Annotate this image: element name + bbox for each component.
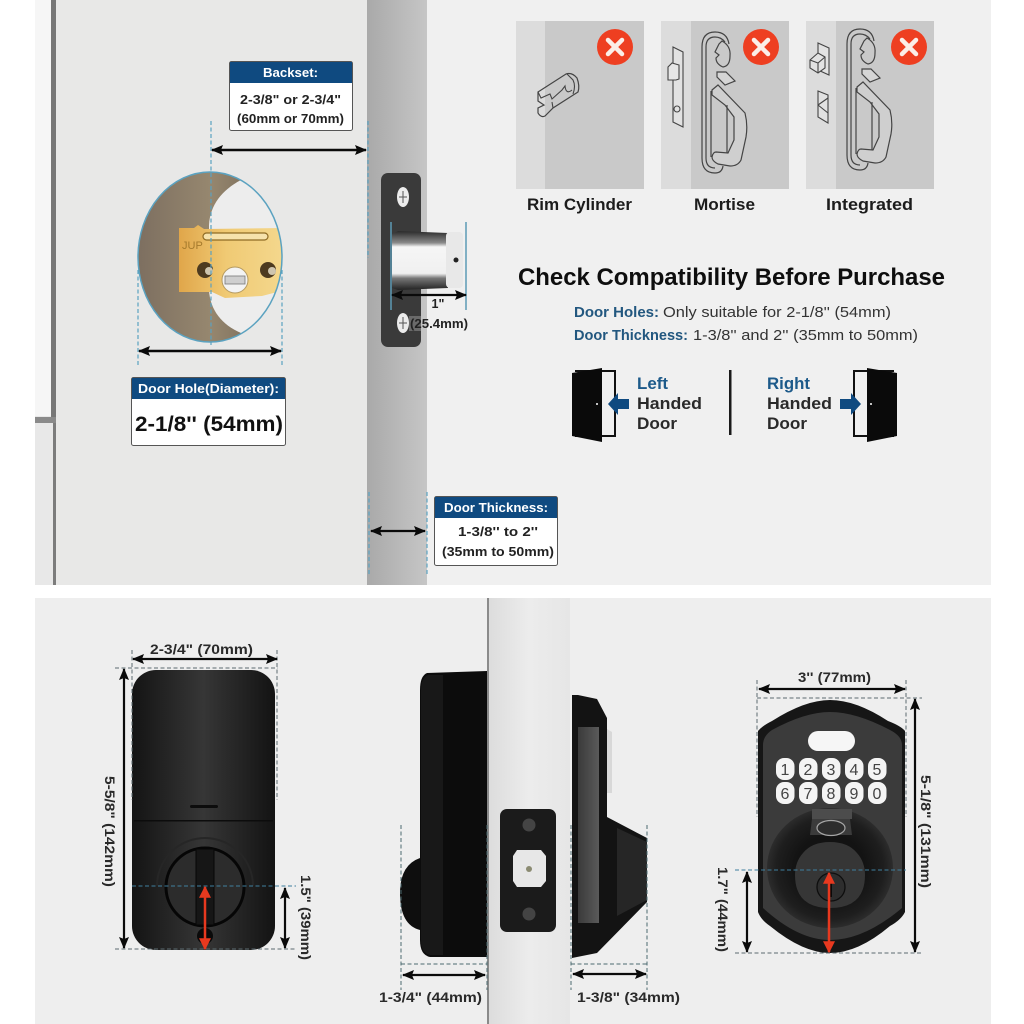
- labels: interior unit: 5-5/8" (142mm): [102, 776, 118, 887]
- dimension lines: interior unit: [115, 650, 296, 949]
- product: interior unit side: [400, 671, 487, 957]
- card: integrated: [806, 21, 934, 189]
- arrow: backset: [212, 149, 366, 151]
- arrow: bolt length: [392, 294, 466, 296]
- label: bolt length: 1": [432, 297, 445, 311]
- labels: interior unit: 2-3/4" (70mm): [150, 641, 253, 657]
- dimension lines: keypad front: [735, 680, 922, 953]
- labels: keypad front: 1.7" (44mm): [715, 867, 731, 952]
- right handed label: [767, 374, 832, 433]
- compatibility notes: [574, 304, 918, 344]
- card: mortise: [661, 21, 789, 189]
- right handed label: Handed: [767, 394, 832, 413]
- keypad buttons: 4: [850, 762, 859, 779]
- callout: door hole diameter: Door Hole(Diameter):: [138, 381, 279, 396]
- callout: door thickness: 1-3/8'' to 2'': [458, 525, 538, 539]
- left handed label: Handed: [637, 394, 702, 413]
- lock type labels: Rim Cylinder: [527, 195, 632, 214]
- callout: door thickness: [434, 496, 558, 566]
- label: bolt length: [410, 297, 468, 331]
- callout: door thickness: Door Thickness:: [444, 501, 548, 515]
- door cross-section: [487, 598, 570, 1024]
- keypad buttons: 1: [781, 762, 790, 779]
- keypad buttons: 2: [804, 762, 813, 779]
- panel: lock dimensions: [35, 598, 991, 1024]
- right handed label: Right: [767, 374, 810, 393]
- callout: backset: 2-3/8" or 2-3/4": [240, 93, 341, 107]
- compatibility notes: Door Holes:: [574, 304, 659, 321]
- keypad buttons: 8: [827, 786, 836, 803]
- left handed label: Door: [637, 414, 677, 433]
- lock type labels: [527, 195, 913, 214]
- handle outline: [847, 29, 892, 170]
- compatibility notes: Only suitable for 2-1/8'' (54mm): [663, 304, 891, 321]
- drilled door hole with latch: JUP: [182, 240, 203, 252]
- left handed label: Left: [637, 374, 668, 393]
- keypad buttons: 6: [781, 786, 790, 803]
- left handed label: [637, 374, 702, 433]
- product: strike plate: [500, 809, 556, 932]
- keypad buttons: 0: [873, 786, 882, 803]
- keypad buttons: [776, 758, 886, 804]
- lock type labels: Integrated: [826, 195, 913, 214]
- door trim: [35, 0, 56, 585]
- card: rim cylinder: [516, 21, 644, 189]
- arrow: door thickness: [371, 530, 425, 532]
- door edge: [367, 0, 427, 585]
- right handed label: Door: [767, 414, 807, 433]
- product: keypad unit side: [572, 695, 647, 958]
- latch plate and bolt: [381, 173, 466, 347]
- product: keypad front: [758, 700, 905, 953]
- dimension lines: side view: [401, 825, 647, 990]
- labels: interior unit: [102, 641, 314, 960]
- labels: side view: 1-3/4" (44mm): [379, 989, 482, 1005]
- compatibility notes: 1-3/8'' and 2'' (35mm to 50mm): [693, 327, 918, 344]
- lock type labels: Mortise: [694, 195, 755, 214]
- panel: door installation: [35, 0, 991, 585]
- compatibility notes: Door Thickness:: [574, 327, 688, 344]
- arrow: hole diameter: [139, 350, 281, 352]
- heading: Check Compatibility Before Purchase: [518, 264, 945, 291]
- handle outline: [702, 32, 747, 173]
- icon: left handed door: [572, 368, 629, 442]
- callout: backset: [230, 62, 352, 130]
- product: interior unit front: [132, 670, 275, 950]
- labels: side view: [379, 989, 680, 1005]
- callout: backset: Backset:: [263, 66, 318, 80]
- icon: right handed door: [840, 368, 897, 442]
- callout: door hole diameter: 2-1/8'' (54mm): [135, 413, 283, 436]
- labels: interior unit: 1.5" (39mm): [298, 875, 314, 960]
- labels: keypad front: [715, 669, 934, 952]
- keypad buttons: 9: [850, 786, 859, 803]
- callout: backset: (60mm or 70mm): [237, 112, 344, 126]
- drilled door hole with latch: [138, 170, 290, 345]
- keypad buttons: 5: [873, 762, 882, 779]
- callout: door thickness: (35mm to 50mm): [442, 545, 554, 559]
- label: bolt length: (25.4mm): [410, 317, 468, 331]
- keypad buttons: 3: [827, 762, 836, 779]
- keypad buttons: 7: [804, 786, 813, 803]
- dimension guide lines: [138, 121, 427, 575]
- callout: door hole diameter: [132, 378, 286, 446]
- labels: keypad front: 5-1/8" (131mm): [918, 775, 934, 888]
- labels: side view: 1-3/8" (34mm): [577, 989, 680, 1005]
- labels: keypad front: 3'' (77mm): [798, 669, 871, 685]
